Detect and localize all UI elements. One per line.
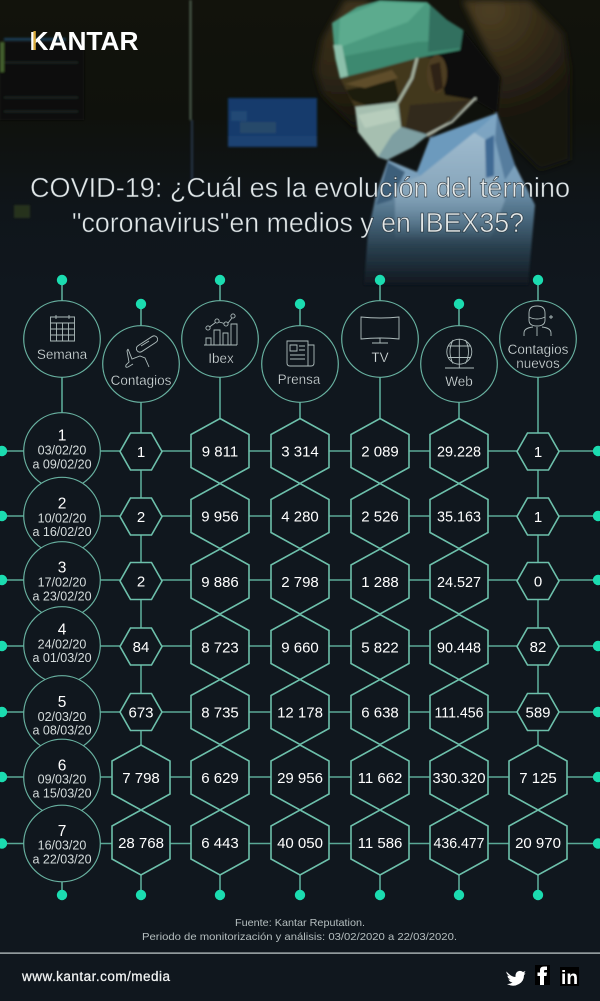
column: Contagios nuevos values: 20 970: [515, 835, 561, 852]
source note: [142, 917, 457, 943]
left row dots: [0, 446, 7, 849]
column: Web values: 330.320: [432, 770, 486, 787]
column: Contagios nuevos values: [509, 433, 567, 875]
header photo: surgeon: [0, 0, 600, 290]
week 4: 4: [58, 622, 67, 638]
connector lines: [2, 280, 598, 895]
header: TV: [342, 301, 418, 377]
column: Ibex values: 9 886: [201, 574, 239, 591]
column: Contagios values: 1: [137, 444, 145, 461]
column: Contagios values: [112, 433, 170, 875]
column: TV values: 11 662: [358, 770, 402, 787]
column: Ibex values: 8 723: [201, 639, 239, 656]
header: Contagios nuevos: [500, 301, 576, 377]
column: TV values: 2 089: [361, 443, 399, 460]
icon: television: [361, 317, 399, 343]
icon: globe: [445, 339, 474, 368]
icon: calendar: [50, 315, 74, 341]
week 3: 17/02/20: [38, 576, 86, 590]
week 7: [24, 805, 100, 882]
column: Contagios values: 2: [137, 509, 145, 526]
header: Contagios nuevos: nuevos: [516, 356, 560, 371]
week 4: a 01/03/20: [32, 651, 92, 665]
column: Contagios nuevos values: 82: [530, 639, 546, 656]
week 5: 5: [58, 694, 66, 711]
column: Prensa values: 4 280: [281, 508, 319, 525]
column: Prensa values: [271, 418, 329, 875]
column: Prensa values: 12 178: [277, 704, 323, 721]
header: Ibex: [182, 301, 258, 377]
right row dots: [593, 446, 600, 849]
header: Web: [421, 326, 497, 402]
column: Ibex values: 6 443: [201, 835, 239, 852]
icon: newspaper: [287, 341, 314, 366]
week 1: a 09/02/20: [32, 458, 92, 472]
footer url: www.kantar.com/media: [21, 969, 170, 984]
column: Prensa values: 40 050: [277, 835, 323, 852]
header: Contagios: [103, 326, 179, 402]
column: Contagios nuevos values: 1: [534, 509, 542, 526]
header: Prensa: [262, 326, 338, 402]
column: Prensa values: 29 956: [277, 770, 323, 787]
header: Web: Web: [445, 374, 473, 389]
column: Ibex values: [191, 418, 249, 875]
column: TV values: 11 586: [358, 835, 402, 852]
week 2: 10/02/20: [38, 512, 86, 526]
column: Web values: 90.448: [437, 639, 481, 656]
column: Prensa values: 2 798: [281, 574, 319, 591]
icon: facebook: [535, 965, 550, 985]
column: Web values: 436.477: [434, 835, 484, 852]
header: Semana: [24, 301, 100, 377]
column: Prensa values: 3 314: [281, 443, 319, 460]
column: Web values: [430, 418, 488, 875]
column: Ibex values: 8 735: [201, 704, 239, 721]
header: Semana: Semana: [37, 347, 88, 362]
column: Ibex values: 9 956: [201, 508, 239, 525]
week 7: 7: [58, 823, 66, 840]
icon: twitter: [506, 971, 526, 986]
footer rule: [0, 952, 600, 954]
bottom pin dots: [57, 890, 543, 900]
column: Contagios nuevos values: 7 125: [519, 770, 557, 787]
column: TV values: 5 822: [361, 639, 399, 656]
column: Ibex values: 6 629: [201, 770, 239, 787]
column: Contagios values: 673: [128, 704, 154, 721]
header: Ibex: Ibex: [208, 351, 234, 366]
column: Ibex values: 9 811: [202, 443, 238, 460]
week 1: 03/02/20: [38, 444, 86, 458]
column: Web values: 29.228: [437, 443, 481, 460]
header: TV: TV: [371, 350, 389, 365]
title: "coronavirus"en medios y en IBEX35?: [72, 207, 524, 238]
column: Web values: 35.163: [437, 508, 481, 525]
column: Contagios values: 28 768: [118, 835, 164, 852]
source note: Fuente: Kantar Reputation.: [235, 917, 365, 929]
column: Web values: 111.456: [434, 704, 484, 721]
week 7: a 22/03/20: [32, 852, 92, 866]
column: Contagios values: 2: [137, 573, 145, 590]
logo: Kantar: KANTAR: [30, 28, 138, 56]
week 4: 24/02/20: [38, 638, 86, 652]
week 7: 16/03/20: [38, 838, 86, 852]
column: TV values: 1 288: [361, 574, 399, 591]
week 2: [24, 477, 100, 554]
week 6: a 15/03/20: [32, 786, 92, 800]
column: Contagios nuevos values: 589: [525, 704, 551, 721]
week 3: a 23/02/20: [32, 590, 92, 604]
title: [30, 172, 570, 238]
week 6: 6: [58, 758, 66, 774]
column: TV values: [351, 418, 409, 875]
week 6: [24, 739, 100, 816]
icon: bar and line chart: [204, 314, 237, 345]
column: Contagios values: 7 798: [122, 770, 160, 787]
top pin dots: [57, 275, 543, 309]
column: Contagios values: 84: [133, 639, 149, 656]
week 5: 02/03/20: [38, 710, 86, 724]
icon: linkedin: in: [561, 968, 578, 989]
column: Web values: 24.527: [437, 574, 481, 591]
week 6: 09/03/20: [38, 772, 86, 786]
week 2: a 16/02/20: [32, 525, 92, 539]
week 4: [24, 607, 100, 683]
column: TV values: 6 638: [361, 704, 399, 721]
column: TV values: 2 526: [361, 508, 399, 525]
social icons: [506, 965, 579, 989]
column: Contagios nuevos values: 1: [534, 444, 542, 461]
week 1: [24, 413, 100, 489]
column: Prensa values: 9 660: [281, 639, 319, 656]
week 5: a 08/03/20: [32, 724, 92, 738]
week 2: 2: [58, 496, 66, 512]
source note: Periodo de monitorización y análisis: 03/02/2020 a 22/03/2020.: [142, 931, 457, 943]
week 1: 1: [58, 428, 66, 444]
header: Contagios nuevos: Contagios: [508, 342, 569, 357]
icon: hand with thermometer: [126, 335, 159, 367]
header: Prensa: Prensa: [278, 372, 321, 387]
week 5: [24, 676, 100, 752]
header: Contagios: Contagios: [111, 373, 172, 388]
title: COVID-19: ¿Cuál es la evolución del término: [30, 172, 570, 203]
column: Contagios nuevos values: 0: [534, 573, 542, 590]
week 3: [24, 542, 100, 618]
week 3: 3: [58, 560, 66, 576]
icon: person with mask: [524, 306, 553, 336]
